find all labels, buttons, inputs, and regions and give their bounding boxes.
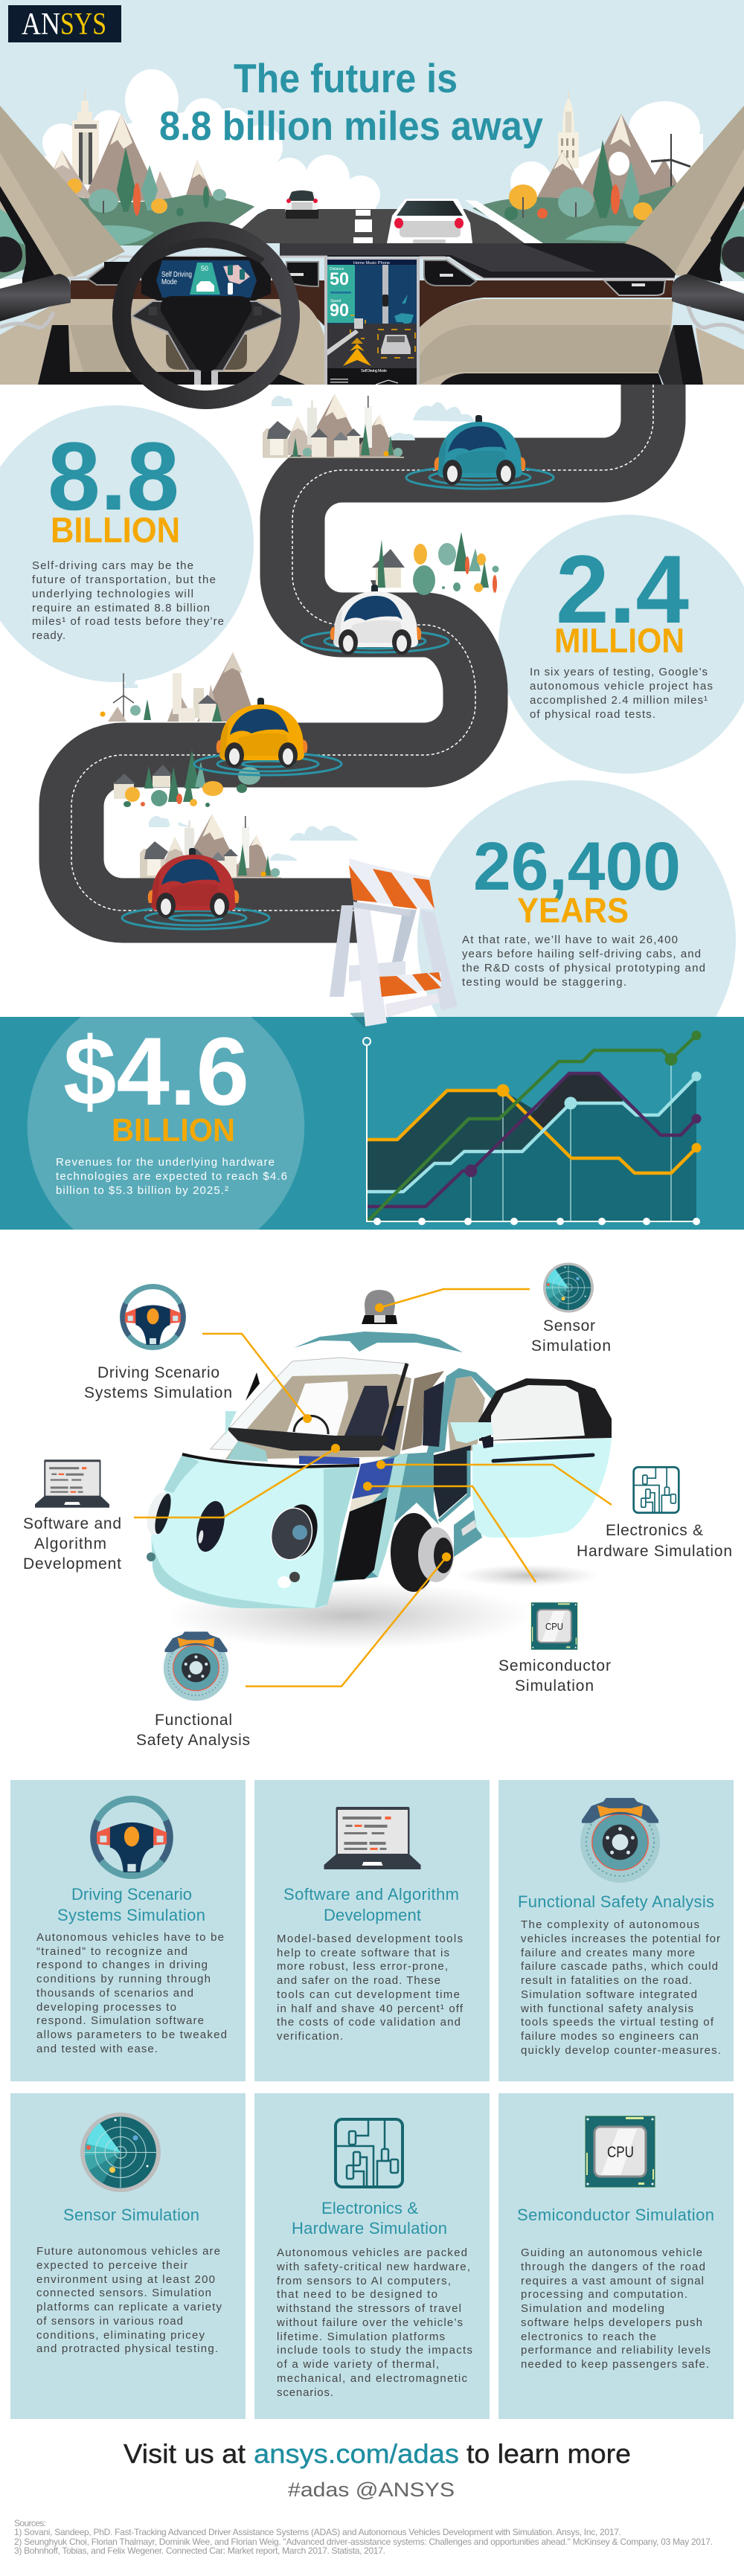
card body: [36, 2245, 222, 2355]
card body: Future autonomous vehicles are: [36, 2245, 220, 2258]
label: software and algorithm development: Algorithm: [34, 1535, 106, 1552]
stat: 2.4 million: accomplished 2.4 million miles¹: [530, 694, 708, 707]
stat: 2.4 million: MILLION: [554, 621, 684, 660]
icon: steering wheel large: [93, 1799, 170, 1876]
card body: [520, 1918, 721, 2057]
centre console touchscreen: 90: [330, 301, 349, 321]
card body: include tools to study the impacts: [277, 2344, 472, 2357]
callout: software: [134, 1444, 340, 1517]
label: electronics and hardware simulation: Electronics &: [606, 1522, 703, 1539]
card body: software helps developers push: [521, 2316, 702, 2329]
icon: brake disc: [164, 1631, 228, 1701]
stat: 8.8 billion: ready.: [32, 629, 65, 642]
card body: verification.: [277, 2030, 343, 2043]
card body: failure and creates many more: [521, 1947, 695, 1959]
label: electronics and hardware simulation: Hardware Simulation: [577, 1543, 732, 1560]
sources: Sources:: [14, 2518, 46, 2528]
road barricade: [330, 858, 458, 1028]
title: The future is: [234, 55, 458, 101]
scenery: city and wind turbine near the yellow car: [100, 652, 257, 722]
card heading: Electronics &: [321, 2199, 418, 2217]
icon: cpu chip large: CPU: [607, 2144, 634, 2161]
card body: Autonomous vehicles have to be: [36, 1931, 224, 1944]
stat: 26,400 years: 26,400: [473, 829, 681, 905]
card body: tools can cut development time: [277, 1988, 460, 2001]
icon: circuit board: [634, 1467, 679, 1513]
card body: the costs of code validation and: [277, 2016, 461, 2029]
white self-driving car: [301, 585, 449, 655]
sources: [14, 2518, 713, 2556]
hashtags: #adas @ANSYS: [288, 2479, 455, 2501]
callout: semiconductor: [363, 1482, 536, 1582]
card body: that need to be designed to: [277, 2288, 437, 2301]
card body: from sensors to AI computers,: [277, 2275, 451, 2287]
revenue circle: [28, 1017, 304, 1230]
car shadow: [164, 1564, 599, 1650]
revenue band: [0, 1017, 744, 1230]
icon: laptop large: [324, 1807, 421, 1869]
centre console touchscreen: Speed: [330, 299, 341, 303]
centre console touchscreen: Distance: [330, 267, 344, 272]
scenery: city and mountains near the teal car: [263, 394, 475, 458]
card body: quickly develop counter-measures.: [521, 2044, 721, 2057]
stat: 26,400 years: the R&D costs of physical prototyping and: [462, 962, 705, 974]
wind turbine: [651, 134, 690, 199]
card body: vehicles increases the potential for: [521, 1933, 720, 1945]
side windows and posts: [0, 186, 744, 292]
card body: and protracted physical testing.: [36, 2342, 218, 2355]
mountains: [45, 114, 686, 212]
card body: Model-based development tools: [277, 1933, 463, 1945]
card heading: Software and Algorithm: [283, 1885, 459, 1904]
header illustration: view from inside a self-driving car: [0, 0, 744, 400]
card body: [277, 1933, 464, 2043]
card body: “trained” to recognize and: [36, 1945, 187, 1958]
label: semiconductor simulation: Semiconductor: [498, 1657, 611, 1674]
card body: failure modes so engineers can: [521, 2030, 699, 2043]
card body: The complexity of autonomous: [521, 1918, 699, 1931]
card body: Simulation and modeling: [521, 2302, 664, 2315]
winding road: [71, 385, 653, 910]
trees in the right landscape: [504, 140, 652, 220]
ANSYS logo: AN: [22, 7, 60, 42]
card body: developing processes to: [36, 2001, 176, 2014]
sources: 3) Bohnhoff, Tobias, and Felix Wegener. Connected Car: Market report, March 2017. Statista, 2017.: [14, 2546, 385, 2556]
card body: performance and reliability levels: [521, 2344, 711, 2357]
car ahead, large: [387, 199, 472, 243]
card body: Guiding an autonomous vehicle: [521, 2246, 702, 2259]
card body: in half and shave 40 percent¹ off: [277, 2002, 464, 2015]
card body: with safety-critical new hardware,: [276, 2261, 470, 2273]
callout: functional safety: [246, 1552, 451, 1686]
card body: Simulation software integrated: [521, 1988, 697, 2001]
footwell shadow: [38, 325, 704, 385]
stat: $4.6 billion: [56, 1017, 287, 1197]
road journey section backdrop circles: [0, 405, 744, 1099]
card heading: Sensor Simulation: [63, 2206, 199, 2224]
instrument cluster screen: 50: [201, 265, 208, 272]
lower dashboard panels: [0, 299, 673, 385]
card body: help to create software that is: [277, 1947, 449, 1959]
car ahead, small: [285, 190, 318, 219]
panel: software and algorithm development: [254, 1780, 490, 2081]
stat: $4.6 billion: $4.6: [63, 1017, 249, 1125]
stat: 2.4 million: autonomous vehicle project has: [530, 680, 713, 693]
icon: cpu chip large: [585, 2116, 655, 2188]
label: functional safety analysis: [136, 1712, 250, 1749]
card body: connected sensors. Simulation: [36, 2287, 211, 2299]
card body: allows parameters to be tweaked: [36, 2029, 227, 2041]
label: software and algorithm development: Development: [23, 1555, 121, 1573]
label: driving scenario: [84, 1364, 232, 1401]
card body: without failure over the vehicle’s: [276, 2316, 463, 2329]
card body: tools speeds the virtual testing of: [521, 2016, 714, 2029]
card heading: Semiconductor Simulation: [517, 2206, 714, 2224]
card body: more robust, less error-prone,: [277, 1960, 448, 1973]
call to action: to learn more: [466, 2438, 631, 2469]
card body: lifetime. Simulation platforms: [277, 2331, 445, 2343]
stat: 8.8 billion: future of transportation, but the: [32, 574, 216, 586]
centre console touchscreen: 50: [330, 269, 349, 289]
centre console touchscreen: [324, 257, 420, 385]
card heading: [57, 1885, 205, 1924]
card heading: [292, 2199, 447, 2238]
sources: 2) Seunghyuk Choi, Florian Thalmayr, Dominik Wee, and Florian Weig. "Advanced driver-assistance systems: Challenges and opportunities ahead." McKinsey & Company, 03 May 2017.: [14, 2537, 713, 2547]
left skyscraper: [72, 91, 99, 184]
card body: with functional safety analysis: [520, 2002, 693, 2015]
title: [159, 55, 543, 149]
label: semiconductor simulation: Simulation: [515, 1677, 594, 1695]
callout: driving scenario: [202, 1334, 312, 1423]
icon: cpu chip: [531, 1602, 577, 1650]
card body: processing and computation.: [521, 2288, 687, 2301]
card body: respond. Simulation software: [36, 2014, 204, 2027]
icon: brake disc large: [580, 1798, 660, 1883]
line chart: [363, 1031, 701, 1225]
centre console touchscreen: Home Music Phone: [353, 261, 390, 266]
card heading: Driving Scenario: [71, 1885, 192, 1904]
card heading: [283, 1885, 459, 1924]
icon: radar large: [80, 2113, 161, 2192]
stat: 8.8 billion: underlying technologies will: [32, 588, 193, 600]
road: [201, 200, 543, 243]
steering wheel: [122, 231, 290, 400]
card body: expected to perceive their: [36, 2259, 187, 2272]
stat: 8.8 billion: Self-driving cars may be the: [32, 559, 193, 572]
panel: functional safety analysis: [498, 1780, 734, 2081]
title: 8.8 billion miles away: [159, 103, 543, 149]
trees in the left landscape: [67, 147, 226, 216]
stat: $4.6 billion: Revenues for the underlying hardware: [56, 1156, 275, 1169]
label: semiconductor simulation: [498, 1657, 611, 1695]
teal self-driving car: [406, 415, 554, 489]
stat: 8.8 billion: BILLION: [51, 511, 180, 550]
label: software and algorithm development: Software and: [23, 1515, 121, 1532]
scenery: trees and house near the white car: [371, 532, 498, 595]
sources: 1) Sovani, Sandeep, PhD. Fast-Tracking Advanced Driver Assistance Systems (ADAS) and Autonomous Vehicles Development with Simulation. Ansys, Inc, 2017.: [14, 2527, 621, 2537]
label: electronics and hardware simulation: [577, 1522, 732, 1560]
label: functional safety analysis: Safety Analysis: [136, 1732, 250, 1749]
stat: 8.8 billion: 8.8: [48, 422, 179, 530]
stat: 2.4 million: [530, 535, 713, 721]
stat: 2.4 million: of physical road tests.: [530, 708, 655, 721]
card body: failure cascade paths, which could: [521, 1960, 718, 1973]
card body: respond to changes in driving: [36, 1959, 208, 1971]
scenery: trees and houses on the lower bend: [113, 750, 260, 807]
stat: $4.6 billion: technologies are expected to reach $4.6: [56, 1170, 287, 1183]
card body: thousands of scenarios and: [36, 1987, 193, 2000]
panel: sensor simulation: [10, 2093, 246, 2419]
A-pillars: [0, 106, 744, 278]
card body: [36, 1931, 227, 2055]
green hills: [45, 179, 692, 245]
call to action: [124, 2438, 631, 2469]
vents: [88, 260, 665, 295]
call to action: Visit us at: [124, 2438, 246, 2469]
label: sensor simulation: Simulation: [531, 1337, 611, 1355]
card body: needed to keep passengers safe.: [521, 2358, 709, 2371]
dashboard top: [280, 243, 676, 279]
instrument cluster screen: [156, 260, 257, 298]
card body: environment using at least 200: [36, 2273, 215, 2286]
stat: 26,400 years: YEARS: [517, 890, 629, 930]
stat: 2.4 million: 2.4: [556, 535, 689, 643]
card body: platforms can replicate a variety: [36, 2301, 222, 2313]
card heading: Hardware Simulation: [292, 2219, 447, 2238]
call to action: ansys.com/adas: [254, 2438, 459, 2469]
clouds behind the horizon: [42, 69, 703, 214]
icon: laptop: [35, 1459, 109, 1508]
card body: [521, 2246, 711, 2371]
stat: 26,400 years: At that rate, we’ll have to wait 26,400: [462, 934, 678, 946]
callout: electronics: [376, 1460, 612, 1505]
card body: Autonomous vehicles are packed: [277, 2246, 467, 2259]
roof sensor: [362, 1290, 397, 1324]
label: sensor simulation: Sensor: [543, 1317, 595, 1334]
card body: mechanical, and electromagnetic: [277, 2372, 467, 2385]
exploded self-driving car: [143, 1332, 612, 1608]
scenery: city near the red car: [140, 815, 359, 878]
stat: $4.6 billion: billion to $5.3 billion by 2025.²: [56, 1184, 228, 1197]
card body: of a wide variety of thermal,: [277, 2358, 439, 2371]
panel: semiconductor simulation: [498, 2093, 734, 2419]
instrument cluster screen: Mode: [161, 278, 177, 286]
stat: 26,400 years: [462, 829, 705, 989]
stat: $4.6 billion: BILLION: [112, 1112, 235, 1149]
card body: conditions, eliminating pricey: [36, 2329, 205, 2342]
stat: 2.4 million: In six years of testing, Google’s: [530, 666, 708, 678]
icon: radar: [543, 1262, 594, 1313]
card body: withstand the stressors of travel: [276, 2302, 461, 2315]
card heading: Functional Safety Analysis: [518, 1892, 714, 1911]
stat: 26,400 years: testing would be staggering.: [462, 976, 626, 989]
ANSYS logo: SYS: [60, 7, 106, 42]
card body: scenarios.: [277, 2386, 333, 2399]
right skyscraper: [558, 91, 579, 168]
icon: steering wheel: [123, 1287, 183, 1347]
card body: result in fatalities on the road.: [521, 1974, 692, 1987]
dashboard trim and wood inlay: [69, 257, 674, 329]
card body: [276, 2246, 472, 2399]
card body: conditions by running through: [36, 1973, 211, 1985]
panel: electronics and hardware simulation: [254, 2093, 490, 2419]
card heading: Systems Simulation: [57, 1906, 205, 1924]
label: software and algorithm development: [23, 1515, 121, 1573]
card body: and safer on the road. These: [277, 1974, 440, 1987]
stat: 26,400 years: years before hailing self-driving cabs, and: [462, 948, 701, 960]
door armrests: [0, 274, 744, 385]
label: driving scenario: Driving Scenario: [97, 1364, 219, 1381]
callout: sensor: [375, 1289, 530, 1312]
icon: cpu chip: CPU: [545, 1621, 563, 1632]
card body: electronics to reach the: [521, 2331, 656, 2343]
yellow self-driving car: [194, 698, 341, 775]
instrument cluster housing: [141, 257, 271, 301]
stat: 8.8 billion: miles¹ of road tests before they’re: [32, 615, 224, 628]
centre console touchscreen: Self Driving Mode: [361, 369, 387, 373]
card body: requires a vast amount of signal: [521, 2275, 704, 2287]
card body: of sensors in various road: [36, 2315, 183, 2328]
stat: 8.8 billion: [32, 422, 224, 642]
stat: 8.8 billion: require an estimated 8.8 billion: [32, 602, 210, 614]
ANSYS logo: [8, 5, 121, 42]
icon: circuit board large: [336, 2119, 403, 2187]
card heading: Development: [324, 1906, 421, 1924]
red self-driving car: [122, 848, 269, 929]
label: driving scenario: Systems Simulation: [84, 1384, 232, 1401]
panel: driving scenario systems simulation: [10, 1780, 246, 2081]
card body: through the dangers of the road: [521, 2261, 705, 2273]
label: functional safety analysis: Functional: [155, 1712, 232, 1729]
label: sensor simulation: [531, 1317, 611, 1355]
instrument cluster screen: Self Driving: [161, 271, 192, 279]
card body: and tested with ease.: [36, 2043, 158, 2055]
